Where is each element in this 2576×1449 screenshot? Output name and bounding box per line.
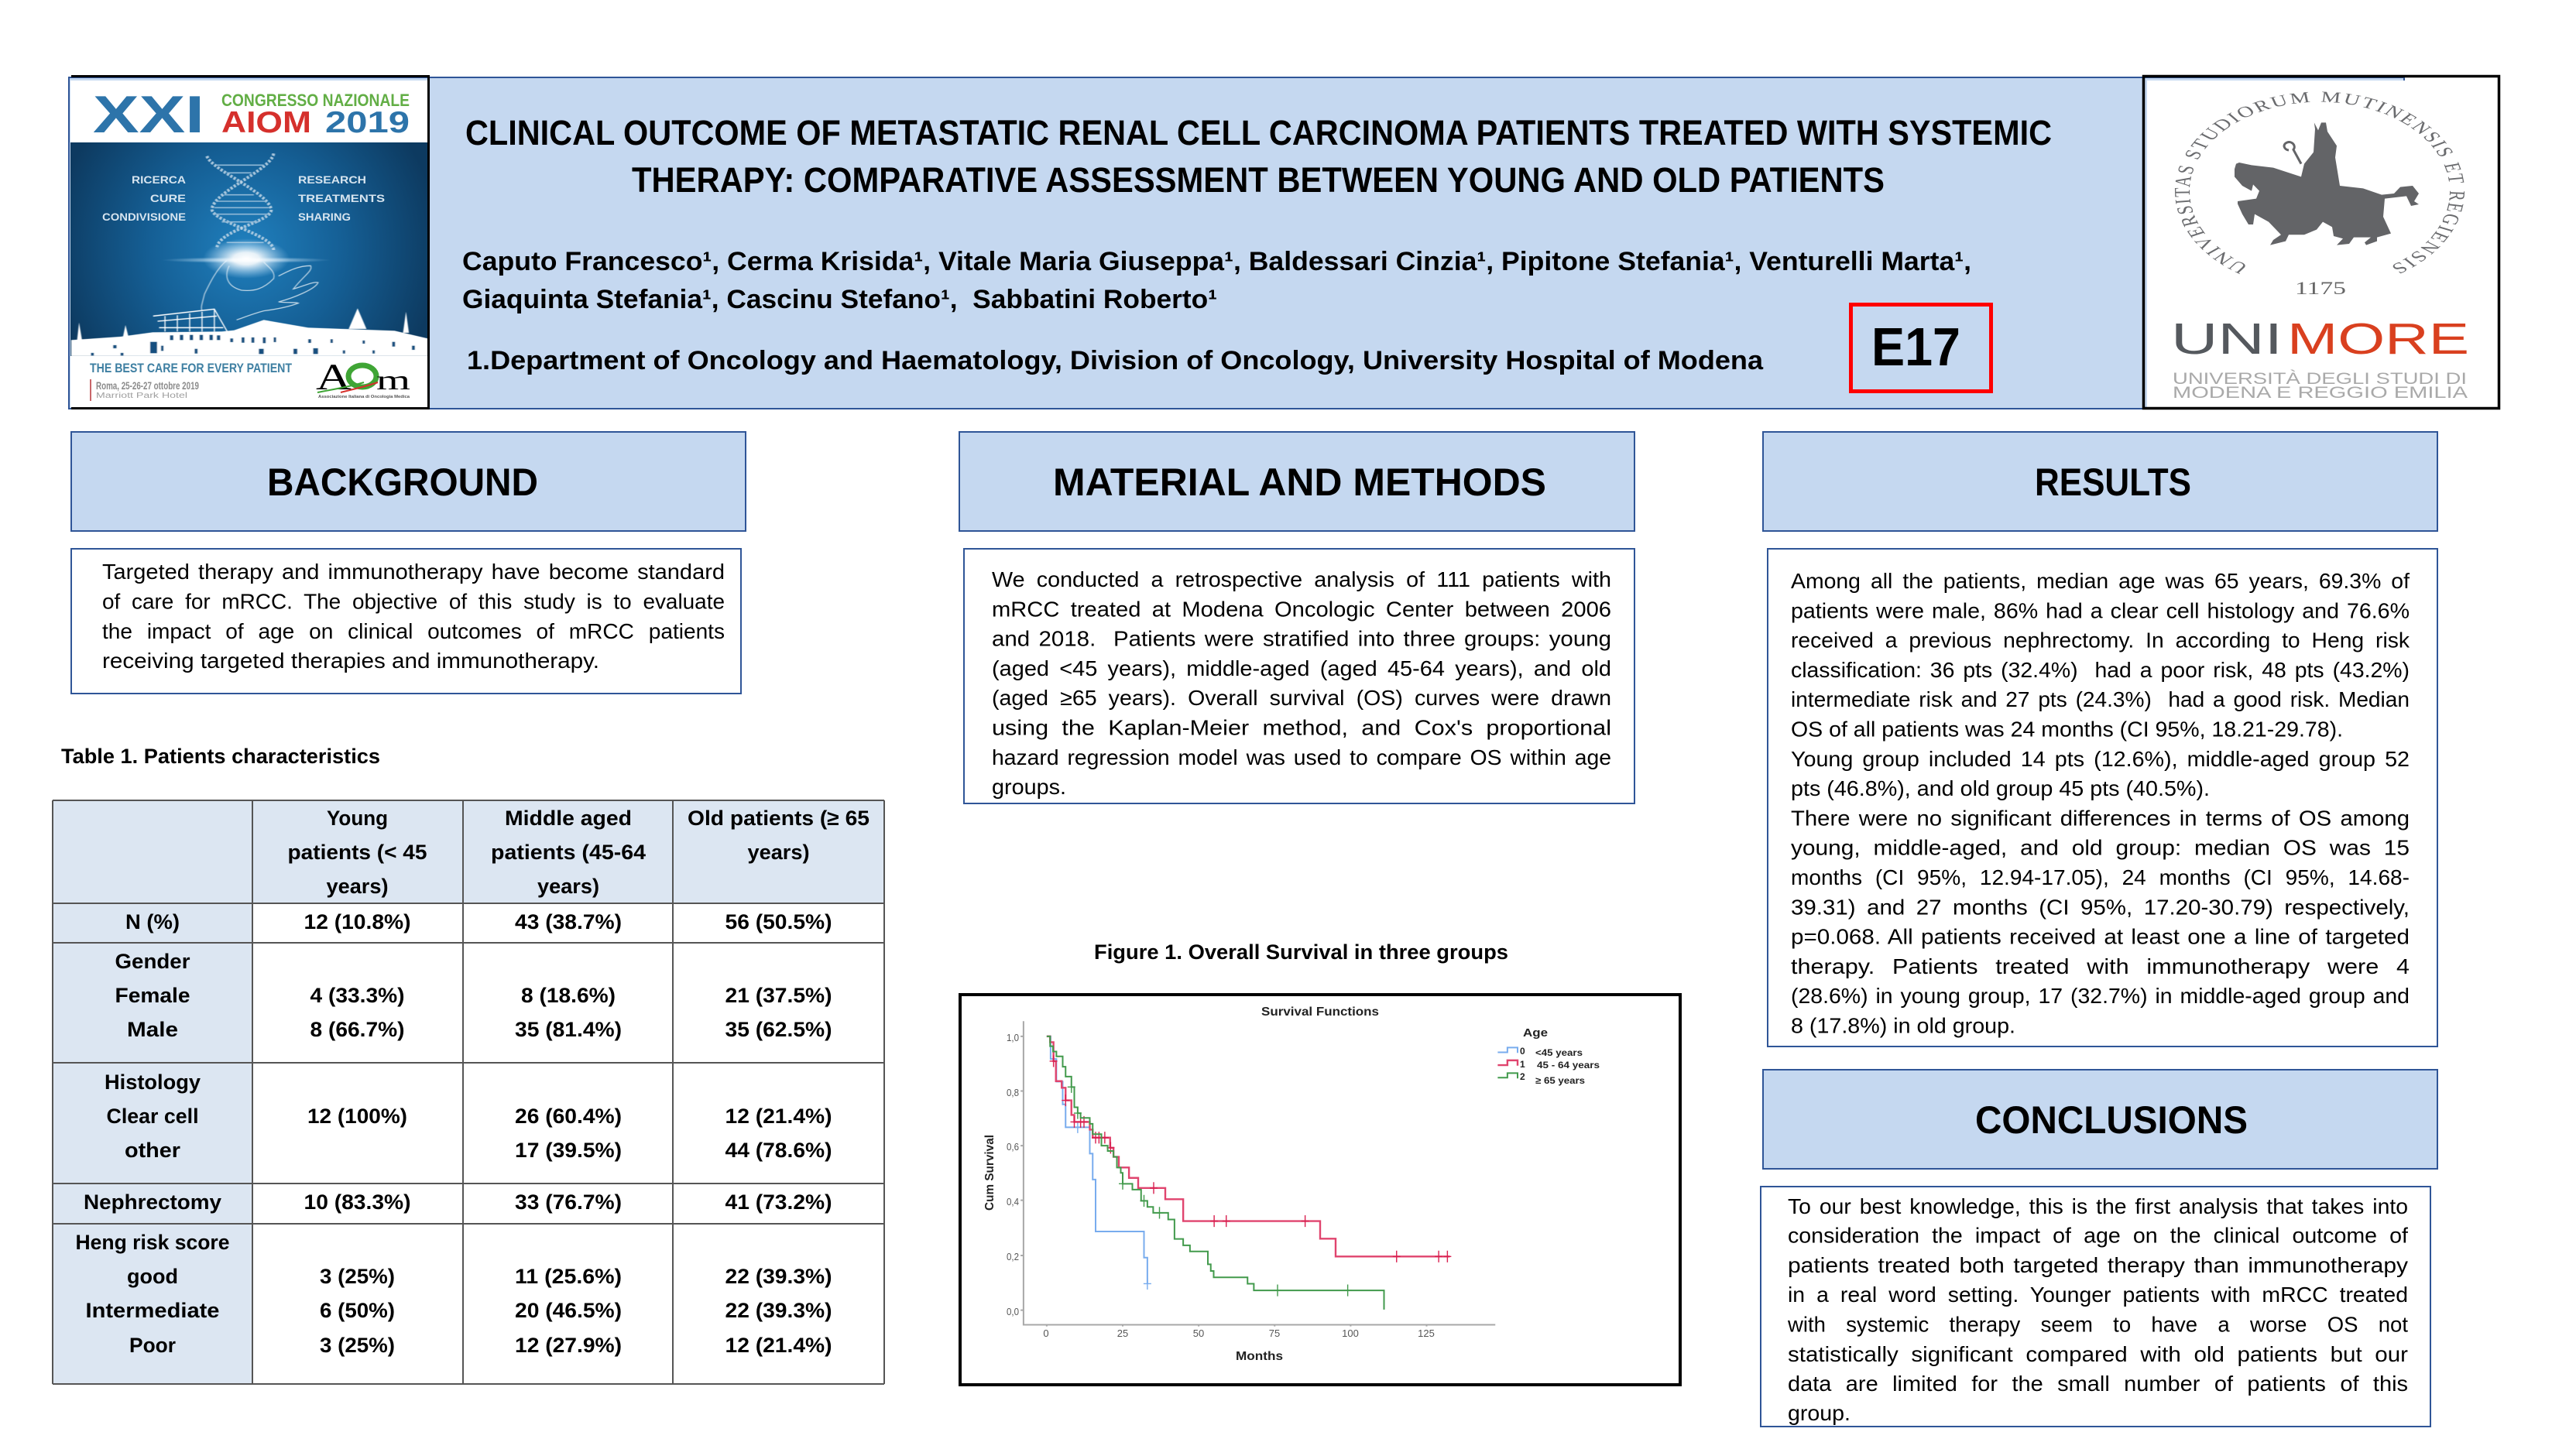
AIOM society mark — [316, 357, 410, 399]
logo tagline: Roma, 25-26-27 ottobre 2019 — [96, 379, 199, 392]
panel: conclusions text: patients treated both targeted therapy than immunotherapy — [1788, 1253, 2408, 1277]
row: Heng risk score: 3 (25%) — [320, 1265, 395, 1288]
logo motto words: RESEARCH — [298, 173, 366, 186]
affiliation: 1.Department of Oncology and Haematology, Division of Oncology, University Hospital of Modena — [467, 346, 1764, 375]
row: Heng risk score: 3 (25%) — [320, 1334, 395, 1357]
row: nephrectomy: 33 (76.7%) — [515, 1190, 622, 1214]
panel: background heading: BACKGROUND — [267, 461, 538, 504]
panel: methods heading — [959, 432, 1634, 531]
logo heading: AIOM — [221, 106, 311, 139]
panel: results text: p=0.068. All patients received at least one a line of targeted — [1791, 925, 2410, 949]
row: histology — [105, 1070, 832, 1162]
panel: methods text: mRCC treated at Modena Oncologic Center between 2006 — [992, 597, 1611, 621]
row: N: N (%) — [125, 910, 180, 933]
row: nephrectomy: 10 (83.3%) — [304, 1190, 410, 1214]
table header row — [288, 807, 870, 898]
row: nephrectomy — [84, 1190, 832, 1214]
table 1: patients characteristics — [53, 800, 884, 1384]
x axis labels — [1043, 1327, 1435, 1339]
y axis labels: 1,0 — [1007, 1032, 1019, 1043]
row: histology: 12 (21.4%) — [725, 1105, 832, 1128]
row: N — [125, 910, 832, 933]
y axis labels: 0,8 — [1007, 1087, 1019, 1098]
panel: conclusions heading: CONCLUSIONS — [1975, 1098, 2248, 1142]
panel: background heading — [71, 432, 746, 531]
logo motto words: TREATMENTS — [298, 192, 385, 204]
row: histology: 44 (78.6%) — [725, 1139, 832, 1162]
chart: overall survival — [960, 995, 1680, 1385]
logo tagline: Marriott Park Hotel — [96, 392, 187, 400]
row: histology: 12 (100%) — [307, 1105, 407, 1128]
row: N: 12 (10.8%) — [304, 910, 410, 933]
panel: conclusions text: data are limited for the small number of patients of this — [1788, 1372, 2408, 1396]
logo motto words: CONDIVISIONE — [102, 211, 186, 223]
title: THERAPY: COMPARATIVE ASSESSMENT BETWEEN YOUNG AND OLD PATIENTS — [632, 160, 1885, 200]
panel: results text: patients were male, 86% had a clear cell histology and 76.6% — [1791, 598, 2410, 622]
legend: 0 — [1520, 1046, 1525, 1057]
table header row: patients (45-64 — [491, 841, 646, 864]
AIOM society mark: m — [376, 365, 410, 396]
table header row: patients (< 45 — [288, 841, 427, 864]
panel: methods text — [964, 549, 1634, 803]
legend — [1520, 1026, 1600, 1086]
congress logo: AIOM 2019 — [70, 76, 429, 409]
table header row: Middle aged — [505, 807, 632, 830]
row: Heng risk score — [76, 1231, 832, 1357]
x axis labels: 25 — [1117, 1327, 1128, 1339]
table header row: Young — [327, 807, 388, 830]
logo heading: 2019 — [325, 106, 410, 139]
y axis labels: 0,0 — [1007, 1306, 1019, 1317]
seal horse and rider — [2235, 122, 2419, 245]
panel: methods text: We conducted a retrospective analysis of 111 patients with — [992, 567, 1611, 591]
x axis labels: 75 — [1269, 1327, 1280, 1339]
legend: 2 — [1520, 1071, 1525, 1082]
title: CLINICAL OUTCOME OF METASTATIC RENAL CELL CARCINOMA PATIENTS TREATED WITH SYSTEMIC — [465, 113, 2052, 152]
university logo: UNIMORE — [2142, 74, 2501, 410]
row: gender: 4 (33.3%) — [310, 984, 404, 1007]
row: Heng risk score: 20 (46.5%) — [515, 1299, 622, 1322]
panel: methods text: using the Kaplan-Meier method, and Cox's proportional — [992, 715, 1611, 740]
logo motto words: RICERCA — [132, 173, 186, 186]
authors: Giaquinta Stefania¹, Cascinu Stefano¹, Sabbatini Roberto¹ — [462, 285, 1217, 314]
header banner — [69, 77, 2404, 409]
panel: methods text: (aged <45 years), middle-aged (aged 45-64 years), and old — [992, 656, 1611, 680]
panel: conclusions text: consideration the impact of age on the clinical outcome of — [1788, 1223, 2408, 1248]
UNIMORE wordmark: UNI — [2171, 314, 2283, 364]
UNIMORE wordmark — [2171, 314, 2469, 364]
y axis labels: 0,6 — [1007, 1141, 1019, 1153]
row: Heng risk score: 11 (25.6%) — [515, 1265, 622, 1288]
row: Heng risk score: 6 (50%) — [320, 1299, 395, 1322]
panel: background text: receiving targeted therapies and immunotherapy. — [102, 649, 599, 673]
x axis labels: 0 — [1043, 1327, 1049, 1339]
panel: methods heading: MATERIAL AND METHODS — [1053, 461, 1546, 504]
x axis labels: 100 — [1342, 1327, 1359, 1339]
university name: MODENA E REGGIO EMILIA — [2173, 384, 2468, 402]
row: nephrectomy: 41 (73.2%) — [725, 1190, 832, 1214]
legend: ≥ 65 years — [1535, 1075, 1585, 1086]
y axis labels — [1007, 1032, 1019, 1317]
panel: results text — [1768, 549, 2437, 1046]
row: histology: Histology — [105, 1070, 201, 1094]
legend: 45 - 64 years — [1537, 1060, 1600, 1070]
seal ring text: UNIVERSITAS STUDIORUM MUTINENSIS ET REGIENSIS — [2174, 91, 2465, 274]
panel: results text: Young group included 14 pts (12.6%), middle-aged group 52 — [1791, 747, 2410, 771]
logo motto words: CURE — [150, 192, 186, 204]
panel: background text: Targeted therapy and immunotherapy have become standard — [102, 560, 725, 584]
x axis title: Months — [1236, 1350, 1283, 1363]
row: histology: 26 (60.4%) — [515, 1105, 622, 1128]
row: histology: other — [125, 1139, 181, 1162]
seal year: 1175 — [2295, 279, 2346, 298]
y axis labels: 0,4 — [1007, 1196, 1019, 1208]
x axis labels: 50 — [1193, 1327, 1204, 1339]
row: histology: Clear cell — [107, 1105, 198, 1128]
row: gender: 21 (37.5%) — [725, 984, 832, 1007]
row: gender: 35 (81.4%) — [515, 1018, 622, 1041]
panel: results text: intermediate risk and 27 pts (24.3%) had a good risk. Median — [1791, 687, 2410, 711]
panel: results text: Among all the patients, median age was 65 years, 69.3% of — [1791, 569, 2410, 593]
panel: conclusions text: group. — [1788, 1401, 1851, 1425]
panel: results heading — [1763, 432, 2437, 531]
row: gender — [115, 950, 832, 1041]
UNIMORE wordmark: MORE — [2287, 314, 2469, 364]
row: Heng risk score: Heng risk score — [76, 1231, 229, 1254]
figure caption: Figure 1. Overall Survival in three groups — [1094, 940, 1508, 964]
panel: results text: therapy. Patients treated with immunotherapy were 4 — [1791, 954, 2410, 978]
row: gender: Gender — [115, 950, 190, 973]
panel: conclusions text: with systemic therapy seem to have a worse OS not — [1787, 1313, 2408, 1336]
row: histology: 17 (39.5%) — [515, 1139, 622, 1162]
panel: background text — [71, 549, 741, 694]
row: gender: 8 (18.6%) — [521, 984, 616, 1007]
title — [465, 113, 2052, 200]
curve: 65 years and over — [1047, 1036, 1384, 1310]
row: nephrectomy: Nephrectomy — [84, 1190, 221, 1214]
glow — [161, 238, 331, 279]
chart axes and curves — [1020, 1021, 1518, 1327]
panel: conclusions text: statistically significant compared with old patients but our — [1788, 1342, 2408, 1366]
y axis labels: 0,2 — [1007, 1251, 1019, 1262]
row: Heng risk score: Intermediate — [85, 1299, 220, 1322]
row: Heng risk score: 12 (21.4%) — [725, 1334, 832, 1357]
DNA, hand and skyline artwork — [71, 153, 427, 356]
AIOM society mark: A — [316, 357, 352, 398]
panel: results text: 39.31) and 27 months (CI 95%, 17.20-30.79) respectively, — [1791, 895, 2410, 919]
legend: 1 — [1520, 1059, 1525, 1070]
logo heading: CONGRESSO NAZIONALE — [221, 91, 410, 110]
row: N: 56 (50.5%) — [725, 910, 832, 933]
panel: conclusions heading — [1763, 1070, 2437, 1169]
panel: results text: 8 (17.8%) in old group. — [1791, 1014, 2015, 1037]
university name — [2173, 370, 2468, 402]
row: gender: Female — [115, 984, 190, 1007]
authors: Caputo Francesco¹, Cerma Krisida¹, Vitale Maria Giuseppa¹, Baldessari Cinzia¹, Pipitone Stefania¹, Venturelli Marta¹, — [462, 247, 1971, 276]
AIOM society mark: Associazione Italiana di Oncologia Medica — [318, 395, 410, 399]
table header row: years) — [327, 875, 389, 898]
x axis labels: 125 — [1418, 1327, 1435, 1339]
panel: methods text: hazard regression model was used to compare OS within age — [992, 745, 1611, 769]
row: Heng risk score: 22 (39.3%) — [725, 1299, 832, 1322]
table heading: Table 1. Patients characteristics — [61, 745, 380, 768]
panel: results text: classification: 36 pts (32.4%) had a poor risk, 48 pts (43.2%) — [1791, 658, 2410, 682]
logo tagline — [90, 361, 293, 401]
logo heading: XXI — [93, 85, 204, 144]
university name: UNIVERSITÀ DEGLI STUDI DI — [2173, 370, 2467, 388]
poster code E17: E17 — [1871, 317, 1960, 377]
panel: results text: (28.6%) in young group, 17 (32.7%) in middle-aged group and — [1791, 984, 2410, 1008]
table header row: years) — [748, 841, 810, 864]
panel: results text: pts (46.8%), and old group 45 pts (40.5%). — [1791, 776, 2210, 800]
panel: results text: months (CI 95%, 12.94-17.05), 24 months (CI 95%, 14.68- — [1791, 865, 2410, 889]
row: Heng risk score: Poor — [129, 1334, 176, 1357]
row: gender: 35 (62.5%) — [725, 1018, 832, 1041]
panel: conclusions text — [1761, 1187, 2430, 1427]
row: Heng risk score: 12 (27.9%) — [515, 1334, 622, 1357]
curve: 45 to 64 years — [1047, 1036, 1451, 1262]
row: gender: Male — [127, 1018, 178, 1041]
panel: background text: of care for mRCC. The objective of this study is to evaluate — [102, 590, 725, 613]
panel: results text: OS of all patients was 24 months (CI 95%, 18.21-29.78). — [1791, 717, 2343, 742]
panel: results heading: RESULTS — [2035, 461, 2191, 504]
panel: methods text: (aged ≥65 years). Overall survival (OS) curves were drawn — [992, 686, 1611, 710]
authors — [462, 247, 1971, 314]
legend: <45 years — [1535, 1047, 1583, 1058]
row: Heng risk score: 22 (39.3%) — [725, 1265, 832, 1288]
logo motto words — [102, 173, 385, 223]
panel: methods text: and 2018. Patients were stratified into three groups: young — [992, 627, 1611, 651]
logo motto words: SHARING — [298, 211, 351, 223]
panel: results text: young, middle-aged, and old group: median OS was 15 — [1791, 836, 2410, 860]
chart title: Survival Functions — [1261, 1005, 1379, 1019]
legend keys — [1497, 1047, 1518, 1078]
panel: conclusions text: in a real word setting. Younger patients with mRCC treated — [1788, 1283, 2408, 1307]
y axis title: Cum Survival — [983, 1135, 996, 1211]
panel: methods text: groups. — [992, 775, 1066, 799]
row: N: 43 (38.7%) — [515, 910, 622, 933]
panel: results text: There were no significant differences in terms of OS among — [1791, 806, 2410, 830]
panel: conclusions text: To our best knowledge, this is the first analysis that takes into — [1788, 1194, 2408, 1218]
logo heading — [93, 85, 410, 144]
panel: background text: the impact of age on clinical outcomes of mRCC patients — [102, 619, 725, 643]
row: gender: 8 (66.7%) — [310, 1018, 404, 1041]
table header row: Old patients (≥ 65 — [688, 807, 870, 830]
legend: Age — [1523, 1026, 1548, 1040]
panel: results text: received a previous nephrectomy. In according to Heng risk — [1791, 629, 2410, 653]
curve: under 45 years — [1047, 1036, 1151, 1290]
poster code E17 — [1851, 305, 1991, 392]
row: Heng risk score: good — [127, 1265, 178, 1288]
table header row: years) — [537, 875, 599, 898]
logo tagline: THE BEST CARE FOR EVERY PATIENT — [90, 361, 293, 375]
